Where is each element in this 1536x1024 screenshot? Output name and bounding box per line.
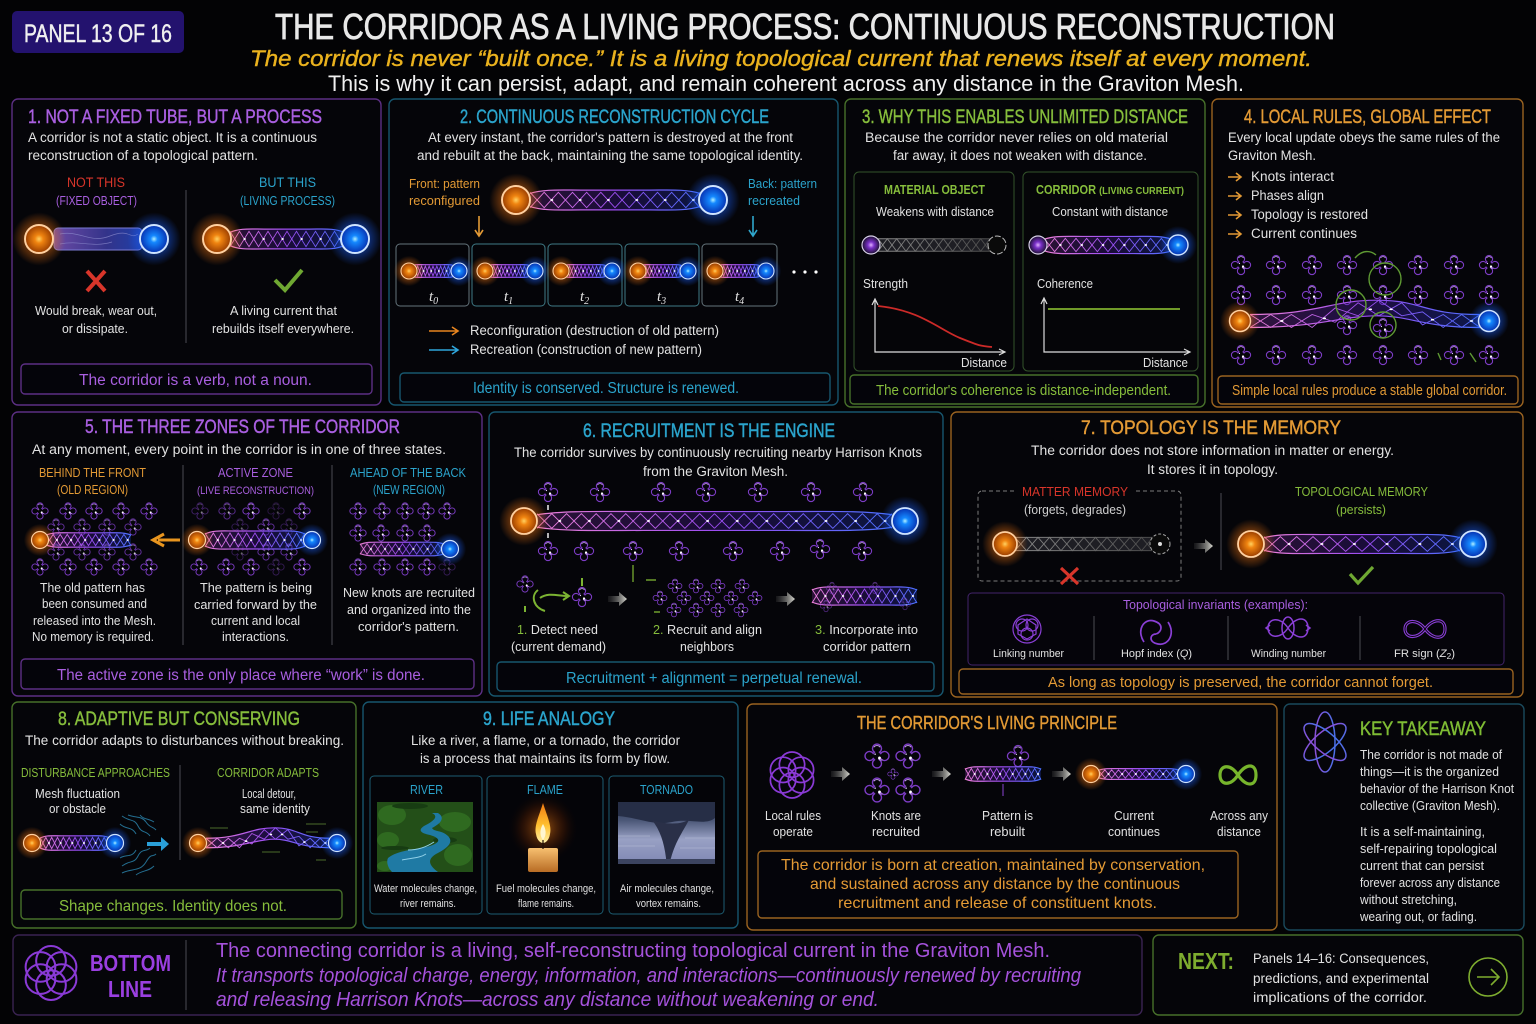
- step labels: Current: [1114, 809, 1154, 823]
- disturbance column: or obstacle: [49, 802, 106, 816]
- invariant labels: Winding number: [1251, 648, 1326, 660]
- time step t3: 3: [660, 296, 666, 307]
- zone: ahead of the back: [350, 466, 467, 575]
- description 4: Graviton Mesh.: [1228, 148, 1316, 163]
- takeaway paragraph 2: wearing out, or fading.: [1359, 910, 1477, 924]
- heading: key takeaway: KEY TAKEAWAY: [1360, 719, 1486, 740]
- arrow: to current: [1052, 767, 1071, 781]
- card: river: Water molecules change,: [374, 883, 477, 895]
- fixed tube diagram: [12, 212, 181, 266]
- adapts column: Local detour,: [242, 787, 296, 801]
- callout 7: [959, 669, 1513, 694]
- intro line: This is why it can persist, adapt, and remain coherent across any distance in the Graviton Mesh.: [328, 71, 1244, 96]
- label: bottom line: LINE: [108, 976, 152, 1002]
- zone text: active: current and local: [211, 614, 300, 628]
- step 1 caption: (current demand): [511, 640, 606, 654]
- matter memory box: [978, 485, 1181, 581]
- topological invariants box: Topological invariants (examples):: [1123, 598, 1308, 612]
- takeaway paragraph 2: It is a self-maintaining,: [1360, 825, 1485, 839]
- divider line: [185, 190, 187, 343]
- zone text: new: New knots are recruited: [343, 586, 475, 600]
- time step t1: 1: [508, 296, 513, 307]
- panel 4: local rules: [1212, 99, 1523, 407]
- sub-panel: corridor living current: Coherence: [1037, 277, 1093, 291]
- divider line: [185, 940, 187, 1010]
- arrow: to knots: [831, 767, 850, 781]
- description 3: far away, it does not weaken with distance.: [893, 148, 1147, 163]
- sub-panel: corridor living current: CORRIDOR (LIVING CURRENT): [1036, 183, 1184, 197]
- sub-panel: material object: Weakens with distance: [876, 205, 994, 219]
- description 1: reconstruction of a topological pattern.: [28, 148, 258, 163]
- step labels: continues: [1108, 825, 1160, 839]
- callout 1: [21, 364, 372, 394]
- caption: would break: or dissipate.: [62, 322, 128, 336]
- heading 9: 9. LIFE ANALOGY: [483, 709, 615, 730]
- panel 8: adaptive but conserving: [12, 702, 356, 928]
- time step t1: t: [504, 289, 508, 305]
- arrow: to pattern: [932, 767, 951, 781]
- heading 6: 6. RECRUITMENT IS THE ENGINE: [583, 421, 835, 442]
- description 1: [28, 130, 317, 163]
- icon: linking number: [1013, 615, 1041, 643]
- step labels: Across any: [1210, 809, 1269, 823]
- adapts column: same identity: [240, 802, 311, 816]
- zone text: old pattern: No memory is required.: [32, 630, 154, 644]
- card: river: RIVER: [410, 783, 443, 797]
- legend: [429, 323, 719, 357]
- panel 5: three zones: [12, 412, 482, 696]
- description 7: It stores it in topology.: [1147, 462, 1278, 477]
- card: flame: flame remains.: [518, 898, 574, 910]
- zone: active zone: [181, 466, 328, 575]
- panel 6: recruitment: [489, 412, 943, 696]
- label: front: reconfigured: [409, 194, 480, 208]
- title: THE CORRIDOR AS A LIVING PROCESS: CONTINUOUS RECONSTRUCTION: [275, 6, 1335, 47]
- icon: hopf index: [1141, 621, 1171, 644]
- heading 1: 1. NOT A FIXED TUBE, BUT A PROCESS: [28, 107, 322, 128]
- zone text: new: corridor's pattern.: [358, 620, 459, 634]
- callout 5: The active zone is the only place where “work” is done.: [57, 667, 425, 684]
- invariant labels: Hopf index (Q): [1121, 648, 1192, 660]
- description 3: Because the corridor never relies on old material: [865, 130, 1168, 145]
- zone: behind the front: BEHIND THE FRONT: [39, 466, 146, 480]
- rule list: Topology is restored: [1251, 207, 1368, 222]
- time step t0: 0: [433, 296, 438, 307]
- arrow: step 2 to 3: [776, 592, 795, 606]
- step 2 caption: [653, 623, 762, 654]
- badge: panel number: PANEL 13 OF 16: [24, 20, 172, 48]
- zone text: old pattern: The old pattern has: [40, 581, 145, 595]
- time step t4: 4: [739, 296, 744, 307]
- takeaway paragraph 2: current that can persist: [1360, 859, 1485, 873]
- label: but this: (LIVING PROCESS): [240, 194, 335, 208]
- matter memory box: MATTER MEMORY: [1022, 485, 1129, 499]
- icon: bottom line rosette: [26, 946, 76, 1000]
- label: bottom line: BOTTOM: [90, 950, 171, 976]
- topological memory: [1226, 485, 1498, 569]
- time step t4: [700, 244, 781, 307]
- time step t2: 2: [584, 296, 589, 307]
- icon: rebuilt pattern: [965, 745, 1041, 796]
- caption: living current: [212, 304, 354, 336]
- takeaway paragraph 2: [1359, 825, 1500, 924]
- card: tornado: Air molecules change,: [620, 883, 714, 895]
- takeaway paragraph 1: things—it is the organized: [1360, 765, 1499, 779]
- topological memory: (persists): [1336, 503, 1386, 517]
- step labels: distance: [1217, 825, 1261, 839]
- heading 2: 2. CONTINUOUS RECONSTRUCTION CYCLE: [460, 107, 769, 128]
- description 7: [1031, 443, 1394, 477]
- badge: panel number: [12, 11, 184, 53]
- time step t4: t: [735, 289, 739, 305]
- time step t3: [623, 244, 703, 307]
- sub-panel: material object: Distance: [961, 356, 1007, 370]
- divider line: [331, 465, 333, 645]
- label: bottom line: [90, 950, 171, 1002]
- label: next: NEXT:: [1178, 948, 1234, 974]
- description 9: [411, 733, 680, 766]
- rule list: [1228, 169, 1368, 241]
- zone text: old pattern: been consumed and: [42, 597, 147, 611]
- next description: implications of the corridor.: [1253, 990, 1427, 1005]
- card: flame: FLAME: [527, 783, 563, 797]
- rule list: Current continues: [1251, 226, 1357, 241]
- invariant labels: FR sign (Z: [1394, 648, 1446, 660]
- description 8: The corridor adapts to disturbances without breaking.: [25, 733, 344, 748]
- matter memory box: (forgets, degrades): [1024, 503, 1126, 517]
- zone text: active: interactions.: [222, 630, 289, 644]
- sub-panel: material object: [854, 172, 1014, 371]
- card: flame: [487, 776, 603, 914]
- icon: infinity fr sign: [1405, 621, 1445, 637]
- zone text: active: [194, 581, 317, 644]
- step labels: rebuilt: [990, 825, 1026, 839]
- invariant labels: [993, 648, 1455, 661]
- time step t1: [470, 244, 550, 307]
- icon: next arrow: [1469, 958, 1507, 996]
- step labels: Local rules: [765, 809, 821, 823]
- step labels: Knots are: [871, 809, 921, 823]
- callout 2: [400, 373, 830, 402]
- bottom line statement: It transports topological charge, energy, information, and interactions—continuously renewed by recruiting: [216, 965, 1081, 987]
- bottom line statement: The connecting corridor is a living, self-reconstructing topological current in the Graviton Mesh.: [216, 940, 1050, 962]
- icon: green check: [1350, 567, 1373, 583]
- step 1 icon: detect need: [517, 576, 592, 612]
- icon: green check: [275, 270, 302, 290]
- panel 9: life analogy: [363, 702, 738, 928]
- panel: key takeaway: [1284, 704, 1524, 930]
- description 9: Like a river, a flame, or a tornado, the corridor: [411, 733, 680, 748]
- callout 8: Shape changes. Identity does not.: [59, 898, 287, 915]
- callout 6: [497, 662, 934, 691]
- takeaway paragraph 1: The corridor is not made of: [1360, 748, 1502, 762]
- callout: born at creation: The corridor is born at creation, maintained by conservation,: [781, 857, 1205, 874]
- callout 3: [850, 375, 1198, 404]
- label: front: [409, 177, 480, 208]
- disturbance column: Mesh fluctuation: [35, 787, 120, 801]
- step 2 icon: recruit and align: [633, 565, 762, 617]
- next description: predictions, and experimental: [1253, 971, 1429, 986]
- sub-panel: material object: Strength: [863, 277, 908, 291]
- adapts column: CORRIDOR ADAPTS: [217, 766, 319, 780]
- takeaway paragraph 1: [1360, 748, 1514, 813]
- divider line: [179, 765, 181, 860]
- panel 3: unlimited distance: [845, 99, 1205, 407]
- invariant labels: Linking number: [993, 648, 1064, 660]
- description 6: [514, 445, 922, 479]
- card: tornado: [609, 776, 724, 914]
- step 3 caption: corridor pattern: [823, 640, 911, 654]
- bottom line statement: [216, 940, 1081, 1011]
- disturbance column: DISTURBANCE APPROACHES: [21, 766, 170, 780]
- main corridor diagram: [489, 173, 740, 227]
- label: not this: [56, 175, 137, 208]
- description 2: At every instant, the corridor's pattern is destroyed at the front: [428, 130, 793, 145]
- description 4: Every local update obeys the same rules of the: [1228, 130, 1500, 145]
- sub-panel: material object: MATERIAL OBJECT: [884, 183, 985, 197]
- legend: Reconfiguration (destruction of old pattern): [470, 323, 719, 338]
- label: front: Front: pattern: [409, 177, 480, 191]
- callout 4: [1218, 376, 1518, 404]
- topological invariants box: [968, 593, 1504, 665]
- description 1: A corridor is not a static object. It is a continuous: [28, 130, 317, 145]
- step 1 caption: 1. Detect need: [517, 623, 598, 637]
- zone: active zone: (LIVE RECONSTRUCTION): [197, 485, 314, 497]
- zone text: new: [343, 586, 475, 634]
- step 3 icon: incorporate: [812, 582, 917, 612]
- heading 7: 7. TOPOLOGY IS THE MEMORY: [1081, 418, 1341, 439]
- heading: living principle: THE CORRIDOR'S LIVING PRINCIPLE: [857, 713, 1117, 733]
- step 2 caption: 2. Recruit and align: [653, 623, 762, 637]
- icon: recruited knots: [865, 744, 920, 802]
- time step t2: [546, 244, 627, 307]
- zone text: new: and organized into the: [347, 603, 471, 617]
- caption: would break: [35, 304, 157, 336]
- card: river: [370, 776, 482, 914]
- corridor with recruited knots: [499, 482, 930, 561]
- adapts column: [182, 766, 353, 860]
- topological memory: TOPOLOGICAL MEMORY: [1295, 485, 1429, 499]
- heading 3: 3. WHY THIS ENABLES UNLIMITED DISTANCE: [862, 107, 1188, 128]
- icon: winding number: [1266, 617, 1310, 639]
- zone text: old pattern: [32, 581, 156, 644]
- heading 8: 8. ADAPTIVE BUT CONSERVING: [58, 709, 300, 730]
- takeaway paragraph 1: collective (Graviton Mesh).: [1360, 799, 1500, 813]
- next description: [1253, 951, 1429, 1005]
- time step t0: t: [429, 289, 433, 305]
- callout 5: [21, 659, 474, 689]
- zone: behind the front: [24, 466, 180, 575]
- living corridor diagram: [190, 212, 382, 266]
- zone: behind the front: (OLD REGION): [57, 483, 128, 497]
- panel: next: [1153, 935, 1523, 1015]
- arrow: step 1 to 2: [608, 592, 627, 606]
- callout 7: As long as topology is preserved, the corridor cannot forget.: [1048, 675, 1433, 691]
- time step t3: t: [657, 289, 661, 305]
- takeaway paragraph 2: without stretching,: [1359, 893, 1457, 907]
- divider line: [1220, 493, 1222, 570]
- panel 7: topology is the memory: [951, 412, 1523, 697]
- ellipsis dots: [792, 270, 818, 274]
- label: back: [748, 177, 817, 208]
- label: not this: NOT THIS: [67, 175, 125, 190]
- description 4: [1228, 130, 1500, 163]
- sub-panel: corridor living current: Distance: [1143, 356, 1188, 370]
- label: back: recreated: [748, 194, 800, 208]
- knot lattice with corridor: [1220, 252, 1509, 365]
- step labels: operate: [773, 825, 813, 839]
- callout 3: The corridor's coherence is distance-independent.: [876, 382, 1171, 399]
- card: river: river remains.: [400, 898, 456, 910]
- zone text: active: carried forward by the: [194, 598, 317, 612]
- description 9: is a process that maintains its form by flow.: [420, 751, 670, 766]
- next description: Panels 14–16: Consequences,: [1253, 951, 1429, 966]
- takeaway paragraph 2: forever across any distance: [1360, 876, 1500, 890]
- time step t0: [394, 244, 474, 307]
- caption: would break: Would break, wear out,: [35, 304, 157, 318]
- icon: red cross: [1061, 568, 1078, 584]
- divider line: [182, 465, 184, 645]
- callout 1: The corridor is a verb, not a noun.: [79, 372, 312, 389]
- arrow: orange down: [475, 216, 483, 236]
- caption: living current: rebuilds itself everywhere.: [212, 322, 354, 336]
- description 6: from the Graviton Mesh.: [643, 464, 788, 479]
- sub-panel: corridor living current: Constant with distance: [1052, 205, 1168, 219]
- icon: red cross: [87, 271, 105, 291]
- step 1 caption: [511, 623, 606, 654]
- heading 5: 5. THE THREE ZONES OF THE CORRIDOR: [85, 417, 400, 438]
- zone text: active: The pattern is being: [200, 581, 312, 595]
- card: tornado: TORNADO: [640, 783, 693, 797]
- callout 8: [21, 890, 342, 919]
- description 7: The corridor does not store information in matter or energy.: [1031, 443, 1394, 458]
- icon: local rules rosette: [770, 752, 814, 798]
- callout 2: Identity is conserved. Structure is renewed.: [473, 380, 739, 397]
- label: back: Back: pattern: [748, 177, 817, 191]
- panel 1: not a fixed tube: [12, 99, 382, 405]
- zone: ahead of the back: AHEAD OF THE BACK: [350, 466, 467, 480]
- arrow: to topological memory: [1194, 539, 1213, 553]
- bottom line statement: and releasing Harrison Knots—across any distance without weakening or end.: [216, 989, 879, 1011]
- icon: key rosette: [1299, 712, 1351, 772]
- card: flame: Fuel molecules change,: [496, 883, 596, 895]
- description 2: [417, 130, 803, 163]
- label: but this: BUT THIS: [259, 175, 316, 190]
- step 3 caption: 3. Incorporate into: [815, 623, 918, 637]
- legend: Recreation (construction of new pattern): [470, 342, 702, 357]
- label: not this: (FIXED OBJECT): [56, 194, 137, 208]
- step 3 caption: [815, 623, 918, 654]
- zone text: old pattern: released into the Mesh.: [33, 614, 156, 628]
- card: tornado: vortex remains.: [636, 898, 701, 910]
- step labels: Pattern is: [982, 809, 1033, 823]
- panel 2: continuous reconstruction cycle: [389, 99, 838, 405]
- label: but this: [240, 175, 335, 208]
- rule list: Phases align: [1251, 188, 1324, 203]
- disturbance column: [16, 766, 170, 875]
- zone: active zone: ACTIVE ZONE: [218, 466, 293, 480]
- caption: living current: A living current that: [230, 304, 338, 318]
- arrow: blue down: [749, 216, 757, 236]
- panel: bottom line: [13, 935, 1142, 1015]
- description 2: and rebuilt at the back, maintaining the same topological identity.: [417, 148, 803, 163]
- step labels: [765, 809, 1269, 839]
- callout: born at creation: recruitment and release of constituent knots.: [838, 895, 1157, 912]
- time step t2: t: [580, 289, 584, 305]
- takeaway paragraph 1: behavior of the Harrison Knot: [1360, 782, 1514, 796]
- invariant labels: ): [1451, 648, 1455, 660]
- description 5: At any moment, every point in the corridor is in one of three states.: [32, 442, 446, 457]
- callout 6: Recruitment + alignment = perpetual renewal.: [566, 670, 862, 687]
- sub-panel: corridor living current: [1023, 172, 1198, 371]
- callout: born at creation: and sustained across any distance by the continuous: [810, 876, 1180, 893]
- step 2 caption: neighbors: [680, 640, 734, 654]
- description 3: [865, 130, 1168, 163]
- takeaway paragraph 2: self-repairing topological: [1360, 842, 1497, 856]
- subtitle: The corridor is never “built once.” It is a living topological current that renews itself at every moment.: [250, 46, 1312, 71]
- rule list: Knots interact: [1251, 169, 1334, 184]
- icon: current corridor: [1075, 758, 1202, 790]
- description 6: The corridor survives by continuously recruiting nearby Harrison Knots: [514, 445, 922, 460]
- step labels: recruited: [872, 825, 920, 839]
- zone: ahead of the back: (NEW REGION): [373, 483, 445, 497]
- panel: the corridor's living principle: [747, 704, 1277, 930]
- invariant labels: 2: [1447, 652, 1452, 661]
- callout: born at creation: [758, 851, 1238, 918]
- icon: infinity: [1220, 766, 1256, 784]
